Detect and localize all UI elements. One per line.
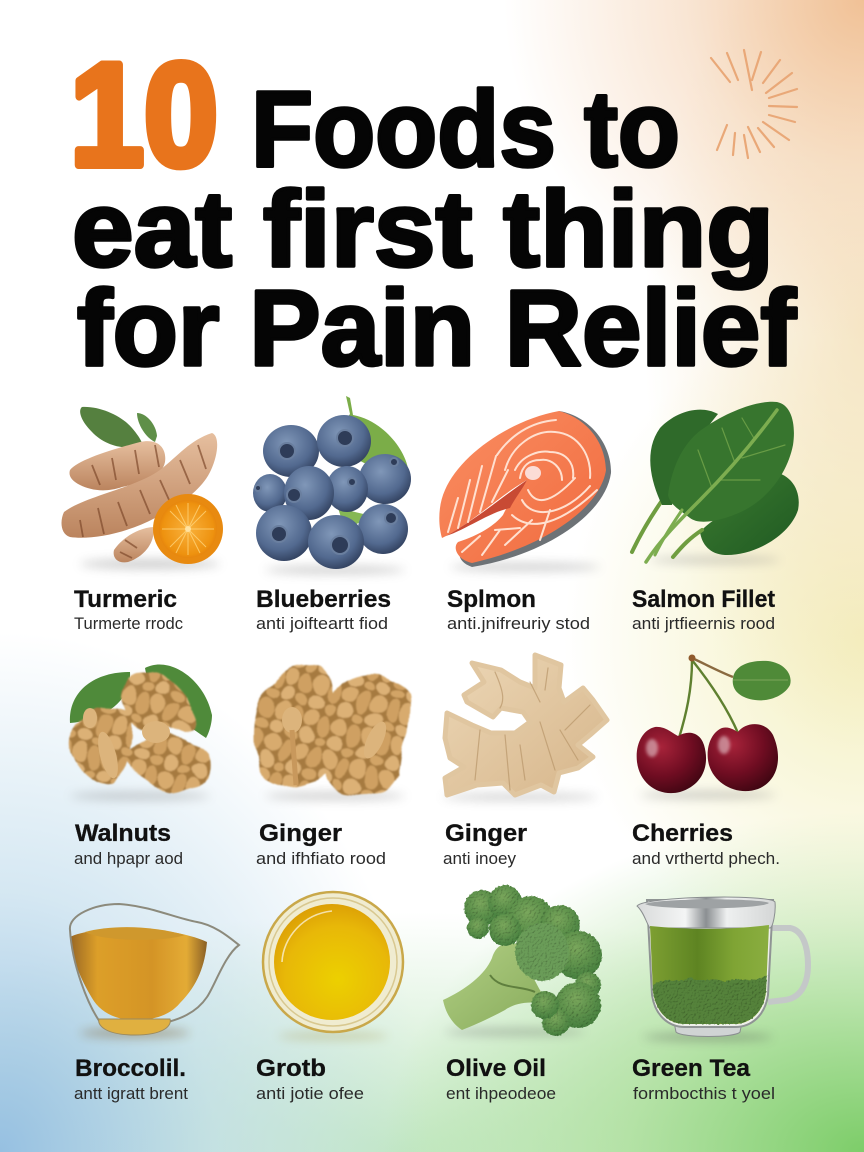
food: broccoli bbox=[443, 885, 602, 1036]
labels row 3: antt igratt brent bbox=[74, 1085, 188, 1103]
label: ginger 1: Ginger bbox=[259, 820, 342, 847]
labels row 3: ent ihpeodeoe bbox=[446, 1085, 556, 1103]
label: turmeric: Turmeric bbox=[74, 586, 177, 613]
icon: mug foot bbox=[674, 1022, 742, 1036]
labels row 3 bbox=[74, 1055, 775, 1103]
icon: spinach stems back bbox=[632, 502, 661, 552]
label: salmon fillet: Salmon Fillet bbox=[632, 586, 775, 613]
icon: salmon skin bbox=[460, 411, 611, 567]
icon: turmeric leaves bbox=[80, 407, 142, 447]
food: blueberries bbox=[253, 396, 411, 574]
label: splmon: Splmon bbox=[447, 586, 536, 613]
food: cherries bbox=[637, 654, 791, 799]
labels row 2: and ifhfiato rood bbox=[256, 850, 386, 868]
icon: walnut halves bbox=[256, 665, 411, 794]
icon: walnut smooth kernels bbox=[282, 707, 391, 785]
labels row 2: and hpapr aod bbox=[74, 850, 183, 868]
title line 2: eat first thing bbox=[72, 168, 774, 289]
icon: cherries bbox=[637, 727, 706, 793]
icon: green tea bbox=[650, 925, 769, 1024]
labels row 1 bbox=[74, 586, 775, 633]
icon: turmeric upper root bbox=[69, 441, 165, 490]
title number 10: 10 bbox=[70, 33, 218, 196]
icon: ginger root bbox=[445, 655, 607, 795]
label: olive oil: Olive Oil bbox=[446, 1055, 546, 1082]
icon: salmon flesh bbox=[439, 411, 606, 563]
labels row 1: Turmerte rrodc bbox=[74, 615, 183, 633]
labels row 1: anti jrtfieernis rood bbox=[632, 615, 775, 633]
icon: walnut smooth kernels bbox=[83, 708, 170, 780]
label: blueberries: Blueberries bbox=[256, 586, 391, 613]
food: spinach bbox=[632, 402, 799, 564]
label: broccoli: Broccolil. bbox=[75, 1055, 186, 1082]
icon: orange slice bbox=[153, 494, 223, 564]
shadow bbox=[265, 566, 405, 574]
icon: tea leaves bbox=[653, 975, 767, 1024]
icon: salmon left lobe shadow bbox=[446, 480, 527, 536]
shadow bbox=[643, 1033, 773, 1041]
icon: cherry leaf bbox=[733, 661, 791, 700]
labels row 1: anti joifteartt fiod bbox=[256, 615, 388, 633]
shadow bbox=[70, 792, 210, 800]
food: walnuts second image bbox=[256, 665, 411, 800]
label: ginger 2: Ginger bbox=[445, 820, 527, 847]
icon: spinach leaf back right bbox=[700, 472, 799, 555]
icon: steel rim bbox=[637, 897, 775, 928]
icon: mug handle bbox=[768, 928, 808, 1002]
food: salmon steak bbox=[439, 411, 611, 571]
icon: ginger ridges bbox=[475, 668, 590, 790]
label: walnuts: Walnuts bbox=[75, 820, 171, 847]
icon: glass foot bbox=[99, 1019, 170, 1035]
icon: salmon white stripes bbox=[448, 420, 597, 555]
labels row 2: anti inoey bbox=[443, 850, 517, 868]
icon: walnut pieces bbox=[69, 671, 211, 792]
shadow bbox=[80, 559, 220, 569]
shadow bbox=[442, 793, 598, 801]
icon: blueberry leaf bbox=[345, 396, 408, 469]
icon: amber oil bbox=[70, 929, 207, 1020]
shadow bbox=[450, 563, 600, 571]
icon: walnut leaves bbox=[70, 672, 130, 723]
icon: mug body bbox=[647, 900, 773, 1027]
label: cherries: Cherries bbox=[632, 820, 733, 847]
icon: glass bowl bbox=[263, 892, 403, 1032]
title bbox=[70, 33, 797, 388]
title line 3: for Pain Relief bbox=[77, 267, 797, 388]
food: green tea mug bbox=[637, 897, 808, 1041]
shadow bbox=[445, 1028, 585, 1036]
icon: spinach leaf back left bbox=[650, 410, 718, 505]
icon: spinach stems and veins bbox=[646, 410, 785, 562]
food: turmeric bbox=[62, 407, 223, 569]
icon: blueberries bbox=[253, 474, 287, 512]
food: ginger bbox=[442, 655, 607, 801]
labels row 3: anti jotie ofee bbox=[256, 1085, 364, 1103]
labels row 1: anti.jnifreuriy stod bbox=[447, 615, 590, 633]
labels row 3: formbocthis t yoel bbox=[633, 1085, 775, 1103]
food: oil bowl bbox=[263, 892, 403, 1040]
shadow bbox=[640, 791, 776, 799]
icon: glass boat bbox=[70, 904, 239, 1022]
icon: broccoli front floret bbox=[515, 923, 569, 981]
icon: spinach leaf main bbox=[668, 402, 794, 522]
title line 1: Foods to bbox=[251, 68, 680, 189]
icon: yellow oil bbox=[274, 904, 390, 1020]
food: oil gravy boat bbox=[70, 904, 239, 1038]
icon: broccoli stem bbox=[443, 943, 550, 1030]
icon: turmeric small root bbox=[114, 527, 154, 562]
icon: broccoli florets bbox=[464, 885, 602, 1036]
label: grotb: Grotb bbox=[256, 1055, 326, 1082]
shadow bbox=[80, 1028, 190, 1038]
shadow bbox=[650, 556, 780, 564]
icon: turmeric main root bbox=[62, 433, 217, 538]
shadow bbox=[278, 1032, 388, 1040]
label: green tea: Green Tea bbox=[632, 1055, 751, 1082]
shadow bbox=[265, 792, 405, 800]
labels row 2: and vrthertd phech. bbox=[632, 850, 780, 868]
labels row 2 bbox=[74, 820, 780, 868]
icon: cherry stems bbox=[679, 660, 738, 738]
icon: sunburst bbox=[711, 50, 797, 158]
food: walnuts bbox=[69, 665, 212, 800]
